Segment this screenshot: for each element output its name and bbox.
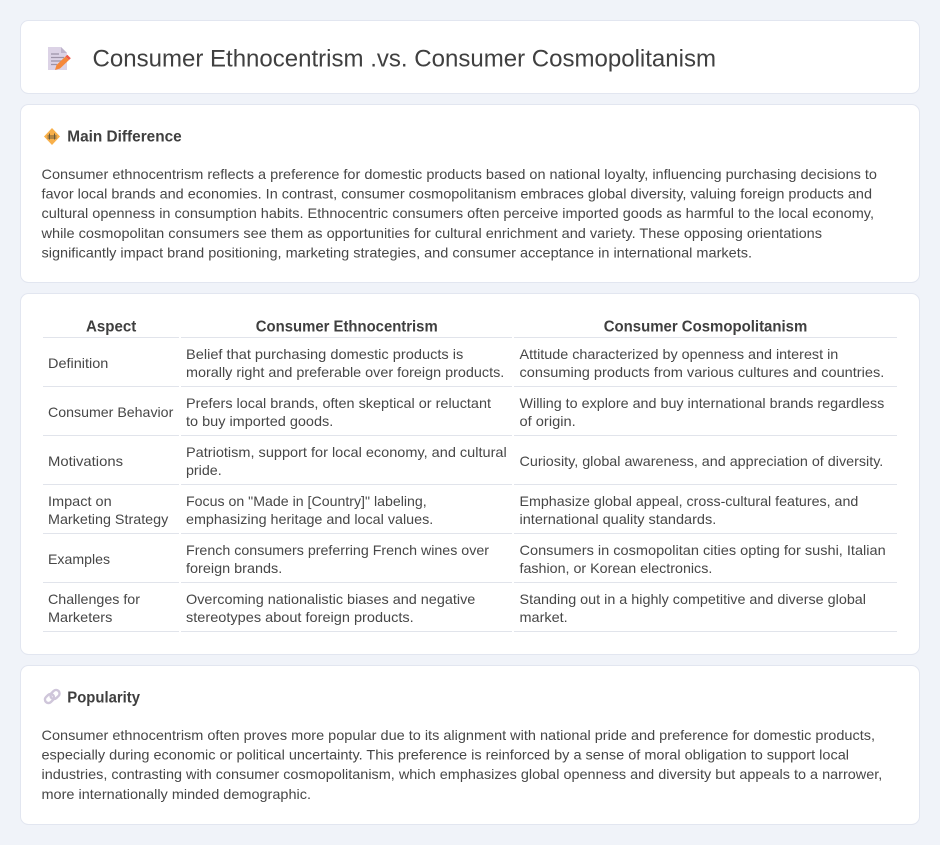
panel: comparison table xyxy=(20,294,920,654)
table row: consumer behavior: Prefers local brands, often skeptical or reluctant xyxy=(186,395,491,411)
text block: main difference: while cosmopolitan consumers see them as opportunities for cultural enrichment and variety. These opposing orientations xyxy=(40,225,822,241)
text block: popularity: especially during economic or political uncertainty. This preference is reinforced by a sense of moral obligation to support local xyxy=(42,747,849,763)
table row: examples: Examples xyxy=(48,551,110,567)
table row: motivations: Curiosity, global awareness, and appreciation of diversity. xyxy=(520,453,883,469)
table header row xyxy=(43,318,897,338)
icon: memo with pencil xyxy=(48,47,71,70)
panel: popularity xyxy=(20,666,920,824)
table row: definition: Belief that purchasing domestic products is xyxy=(186,346,463,362)
heading: main difference: Main Difference xyxy=(67,129,182,146)
table row: impact on marketing strategy xyxy=(43,493,897,534)
table header row: Aspect xyxy=(86,318,137,336)
table header row: Consumer Ethnocentrism xyxy=(256,318,438,336)
table row: definition: morally right and preferable over foreign products. xyxy=(186,364,504,380)
table row: motivations: Motivations xyxy=(48,453,123,469)
text block: popularity: more internationally minded demographic. xyxy=(42,786,311,802)
text block: popularity: Consumer ethnocentrism often proves more popular due to its alignment with national pride and preference for domestic products, xyxy=(42,727,875,743)
table row: definition xyxy=(43,346,897,387)
table row: impact on marketing strategy: Emphasize global appeal, cross-cultural features, and xyxy=(520,493,858,509)
table row: impact on marketing strategy: Impact on xyxy=(48,493,112,509)
table row: examples: fashion, or Korean electronics. xyxy=(520,560,712,576)
title: Consumer Ethnocentrism .vs. Consumer Cosmopolitanism xyxy=(92,46,716,72)
panel: header xyxy=(20,20,920,94)
heading: popularity: Popularity xyxy=(67,690,140,706)
table row: impact on marketing strategy: Focus on "Made in [Country]" labeling, xyxy=(186,493,427,509)
text block: main difference xyxy=(40,166,877,260)
table row: challenges for marketers: stereotypes about foreign products. xyxy=(186,609,414,625)
table row: impact on marketing strategy: international quality standards. xyxy=(520,511,716,527)
table row: consumer behavior xyxy=(43,395,897,436)
table row: consumer behavior: to buy imported goods. xyxy=(186,413,333,429)
text block: main difference: significantly impact brand positioning, marketing strategies, and consumer acceptance in international markets. xyxy=(42,244,752,260)
table row: challenges for marketers: Marketers xyxy=(48,609,112,625)
icon: orange diamond xyxy=(44,128,60,145)
icon: chain link xyxy=(43,688,61,705)
table row: consumer behavior: Willing to explore and buy international brands regardless xyxy=(520,395,884,411)
text block: main difference: favor local brands and economies. In contrast, consumer cosmopolitanism embraces global diversity, valuing foreign products and xyxy=(42,186,872,202)
table row: examples: foreign brands. xyxy=(186,560,282,576)
table row: examples xyxy=(43,542,897,583)
table row: definition: Attitude characterized by openness and interest in xyxy=(520,346,838,362)
table header row: Consumer Cosmopolitanism xyxy=(604,318,807,336)
table row: motivations: Patriotism, support for local economy, and cultural xyxy=(186,444,507,460)
table row: definition: consuming products from various cultures and countries. xyxy=(520,364,884,380)
panel: main difference xyxy=(20,104,920,282)
table row: definition: Definition xyxy=(48,355,108,371)
table row: examples: Consumers in cosmopolitan cities opting for sushi, Italian xyxy=(520,542,886,558)
table row: challenges for marketers: Overcoming nationalistic biases and negative xyxy=(186,591,476,607)
table row: consumer behavior: of origin. xyxy=(520,413,576,429)
table row: impact on marketing strategy: Marketing Strategy xyxy=(48,511,168,527)
table row: motivations xyxy=(43,444,897,485)
table row: consumer behavior: Consumer Behavior xyxy=(48,404,174,420)
table row: impact on marketing strategy: emphasizing heritage and local values. xyxy=(186,511,433,527)
table row: challenges for marketers: Standing out in a highly competitive and diverse global xyxy=(520,591,866,607)
table row: challenges for marketers xyxy=(43,591,897,632)
table row: challenges for marketers: Challenges for xyxy=(48,591,140,607)
table row: challenges for marketers: market. xyxy=(520,609,568,625)
text block: main difference: Consumer ethnocentrism reflects a preference for domestic products based on national loyalty, influencing purchasing decisions to xyxy=(42,166,877,182)
table row: examples: French consumers preferring French wines over xyxy=(186,542,489,558)
table row: motivations: pride. xyxy=(186,462,222,478)
text block: popularity xyxy=(42,727,882,802)
text block: main difference: cultural openness in consumption habits. Ethnocentric consumers often perceive imported goods as harmful to the local economy, xyxy=(42,205,874,221)
text block: popularity: industries, contrasting with consumer cosmopolitanism, which emphasizes global openness and diversity but appeals to a narrower, xyxy=(42,766,882,782)
